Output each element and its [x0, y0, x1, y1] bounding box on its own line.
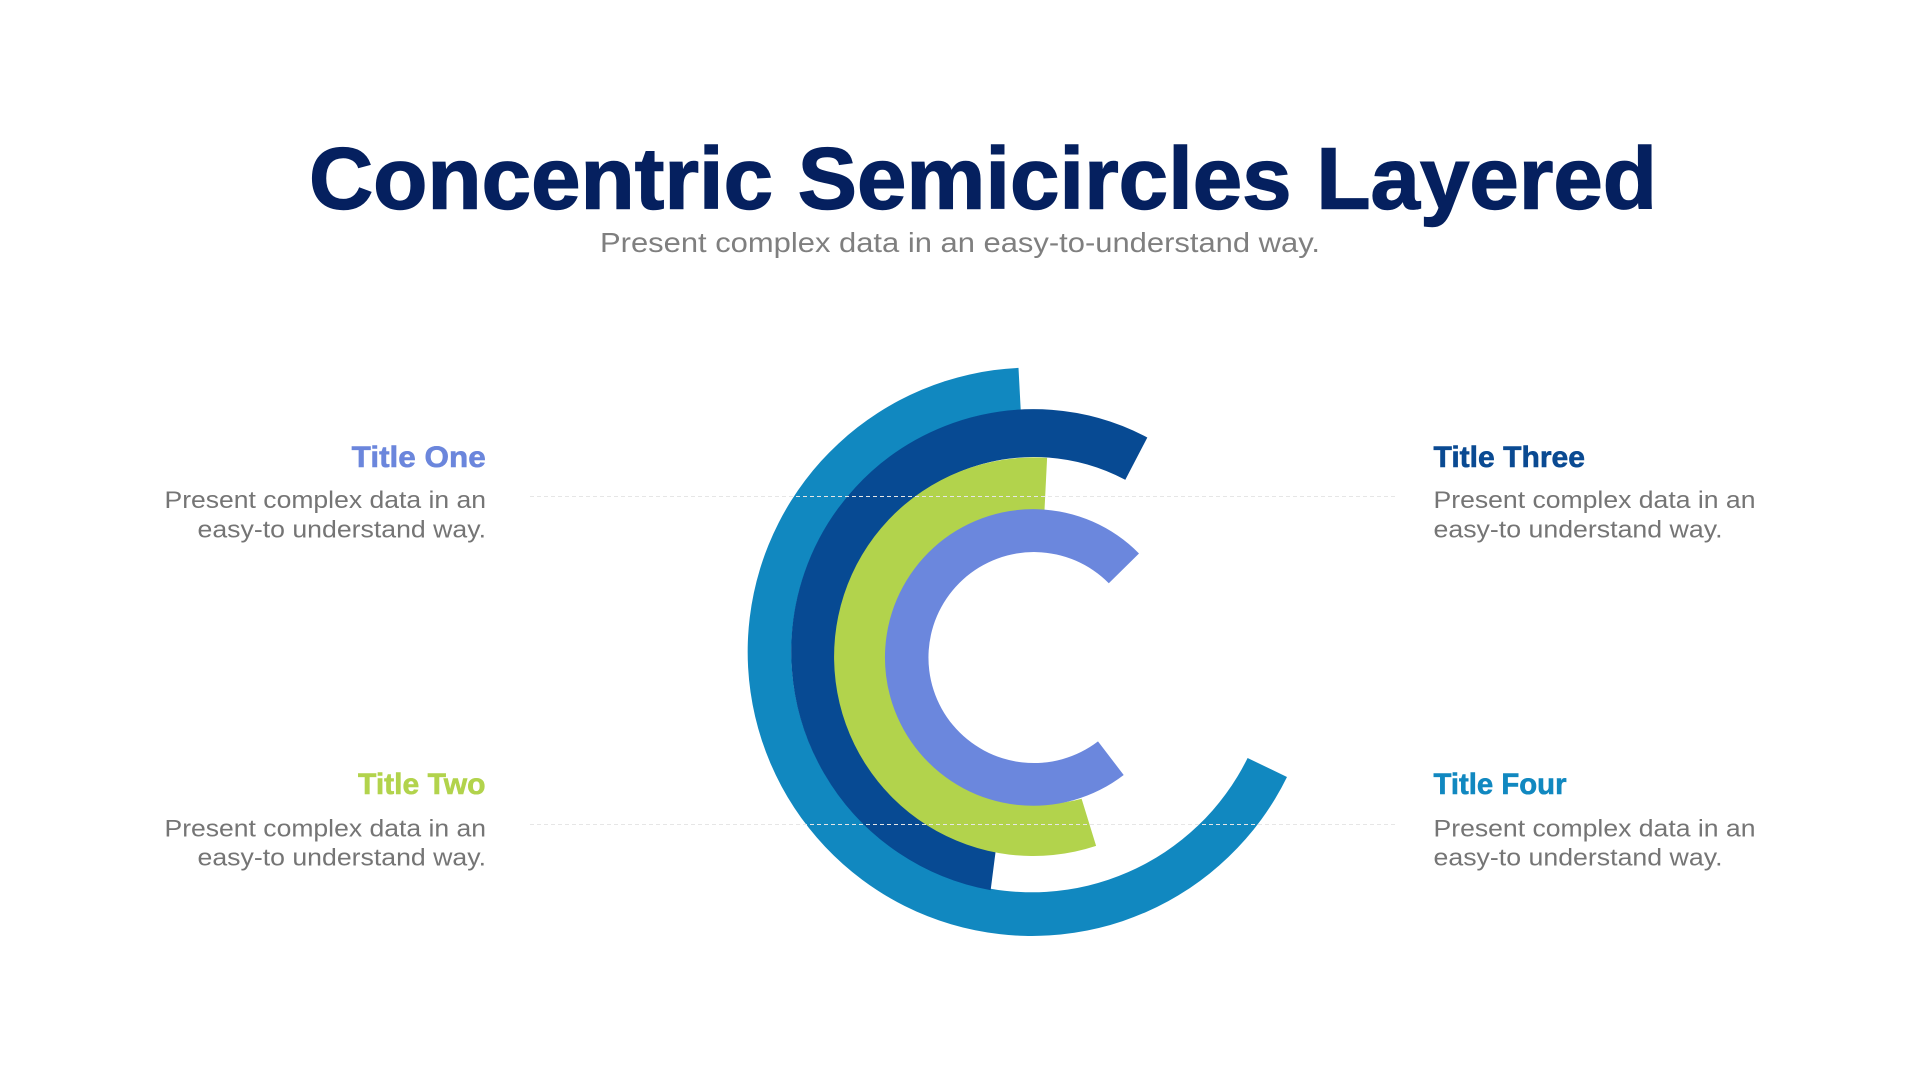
- text block: Title Four: [1434, 768, 1756, 872]
- text block: Title One: easy-to understand way.: [198, 516, 486, 544]
- connector lines: [530, 496, 1397, 824]
- text block: Title Four: Title Four: [1434, 768, 1567, 801]
- text block: Title Three: Title Three: [1434, 441, 1585, 474]
- text block: Title One: [164, 441, 486, 544]
- text block: Title Four: Present complex data in an: [1434, 816, 1756, 843]
- text block: Title One: Title One: [352, 441, 486, 474]
- arc: outer blue, Title Four: [748, 368, 1287, 936]
- text block: Title Two: Present complex data in an: [164, 816, 486, 843]
- chart: concentric semicircles: [748, 368, 1287, 936]
- arc: periwinkle, Title One: [885, 509, 1139, 806]
- text block: Title Three: Present complex data in an: [1434, 487, 1756, 514]
- text block: Title Two: easy-to understand way.: [198, 844, 486, 872]
- text block: Title Two: Title Two: [358, 768, 486, 801]
- text block: Title Three: [1434, 441, 1756, 544]
- text block: Title Four: easy-to understand way.: [1434, 844, 1722, 872]
- arc: green, Title Two: [834, 457, 1096, 856]
- subtitle: Present complex data in an easy-to-understand way.: [600, 227, 1320, 258]
- title: Concentric Semicircles Layered: [309, 130, 1657, 228]
- arc: navy, Title Three: [792, 410, 1147, 890]
- text block: Title Two: [164, 768, 486, 872]
- text block: Title Three: easy-to understand way.: [1434, 516, 1722, 544]
- text block: Title One: Present complex data in an: [164, 487, 486, 514]
